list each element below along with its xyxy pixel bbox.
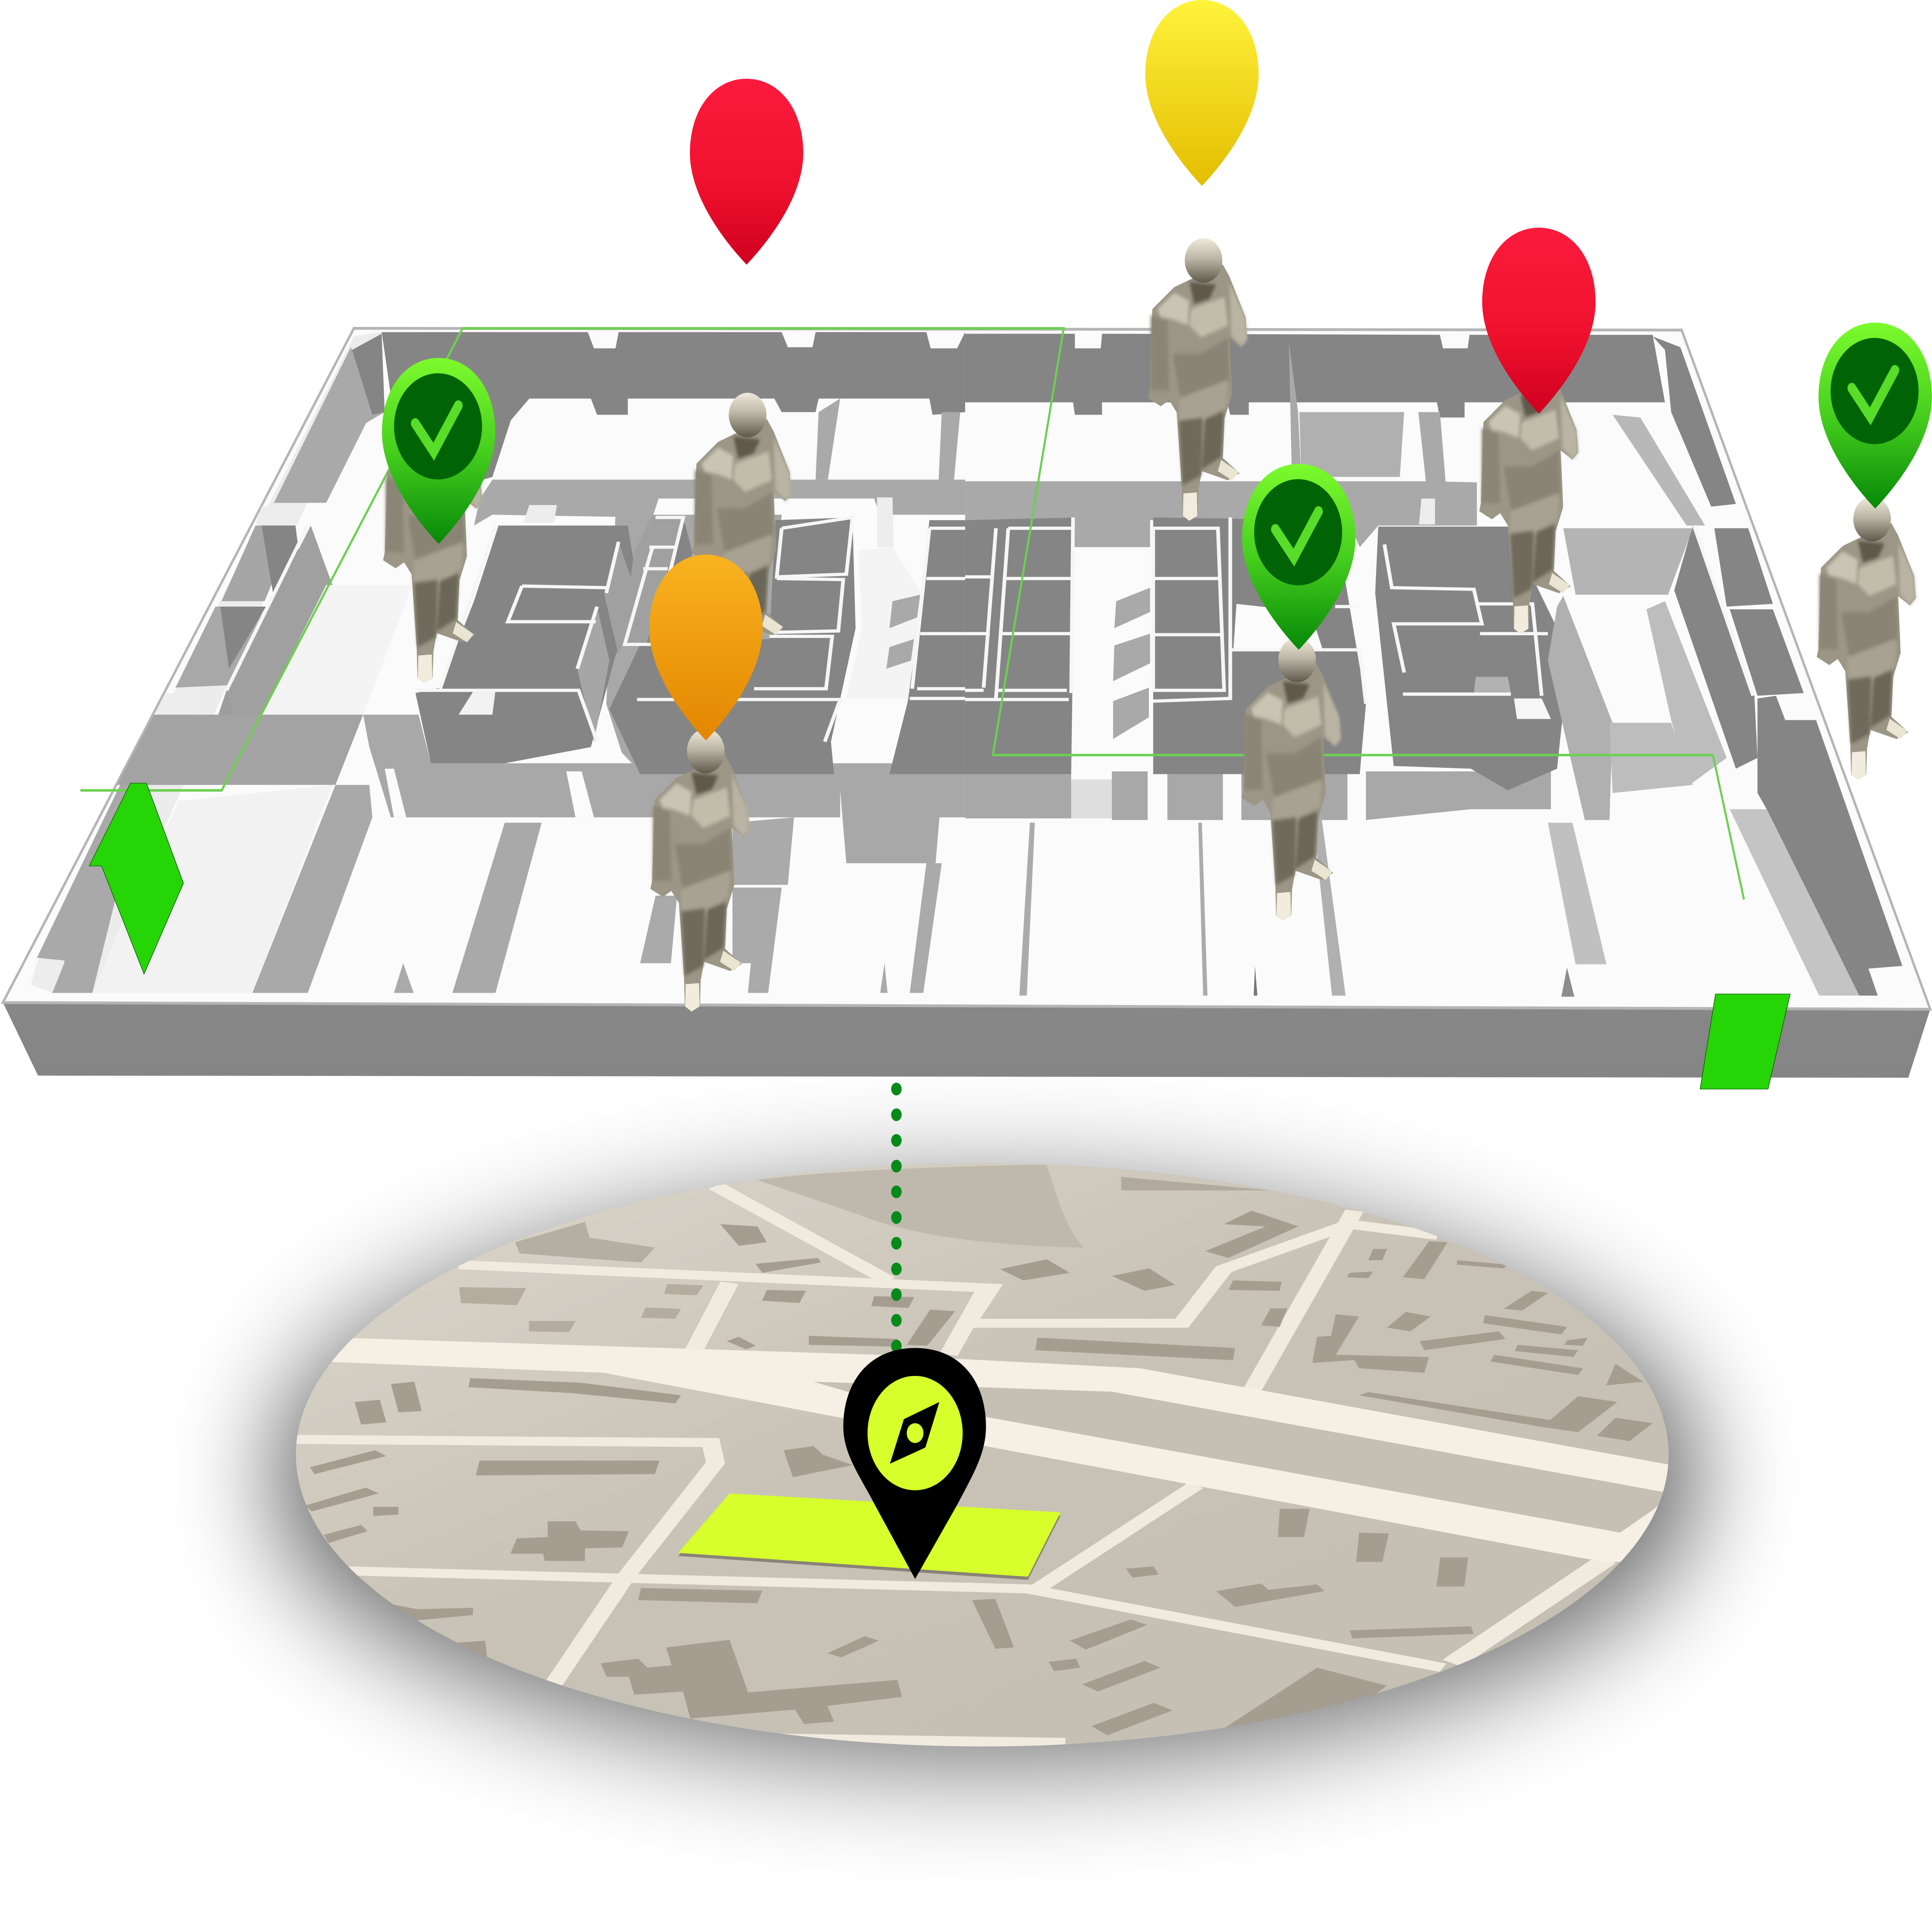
person: right back xyxy=(1479,351,1578,634)
map location pin with compass xyxy=(843,1348,986,1579)
dotted connector between map and floor xyxy=(889,1089,903,1347)
floor slab top surface xyxy=(3,328,1930,1009)
pin: green check, right xyxy=(1818,323,1932,509)
pin: red, left xyxy=(690,79,803,265)
person: centre back xyxy=(692,393,791,675)
person: outside right xyxy=(1817,497,1916,779)
map shadow xyxy=(269,1193,1702,1758)
panel: street map xyxy=(269,1163,1702,1758)
pin: green check, centre xyxy=(1242,464,1355,650)
floor slab front face xyxy=(3,1003,1930,1078)
green entry marker: left xyxy=(89,783,184,974)
pin: red, right xyxy=(1482,228,1595,413)
pin: orange xyxy=(649,554,763,740)
walls: right half xyxy=(965,334,1902,997)
green entry marker: right xyxy=(1700,994,1790,1089)
highlighted building plot xyxy=(678,1493,1061,1580)
person: far left xyxy=(383,400,482,683)
map disc with roads and buildings xyxy=(296,1163,1672,1747)
panel: 3D floor plan xyxy=(3,328,1930,1078)
pin: yellow xyxy=(1145,0,1259,186)
route line xyxy=(80,328,1744,900)
walls: left half xyxy=(31,332,965,993)
person: front left xyxy=(650,729,750,1012)
pin: green check, left xyxy=(382,358,495,544)
person: front right xyxy=(1242,638,1341,920)
person: back right of centre xyxy=(1148,238,1247,521)
